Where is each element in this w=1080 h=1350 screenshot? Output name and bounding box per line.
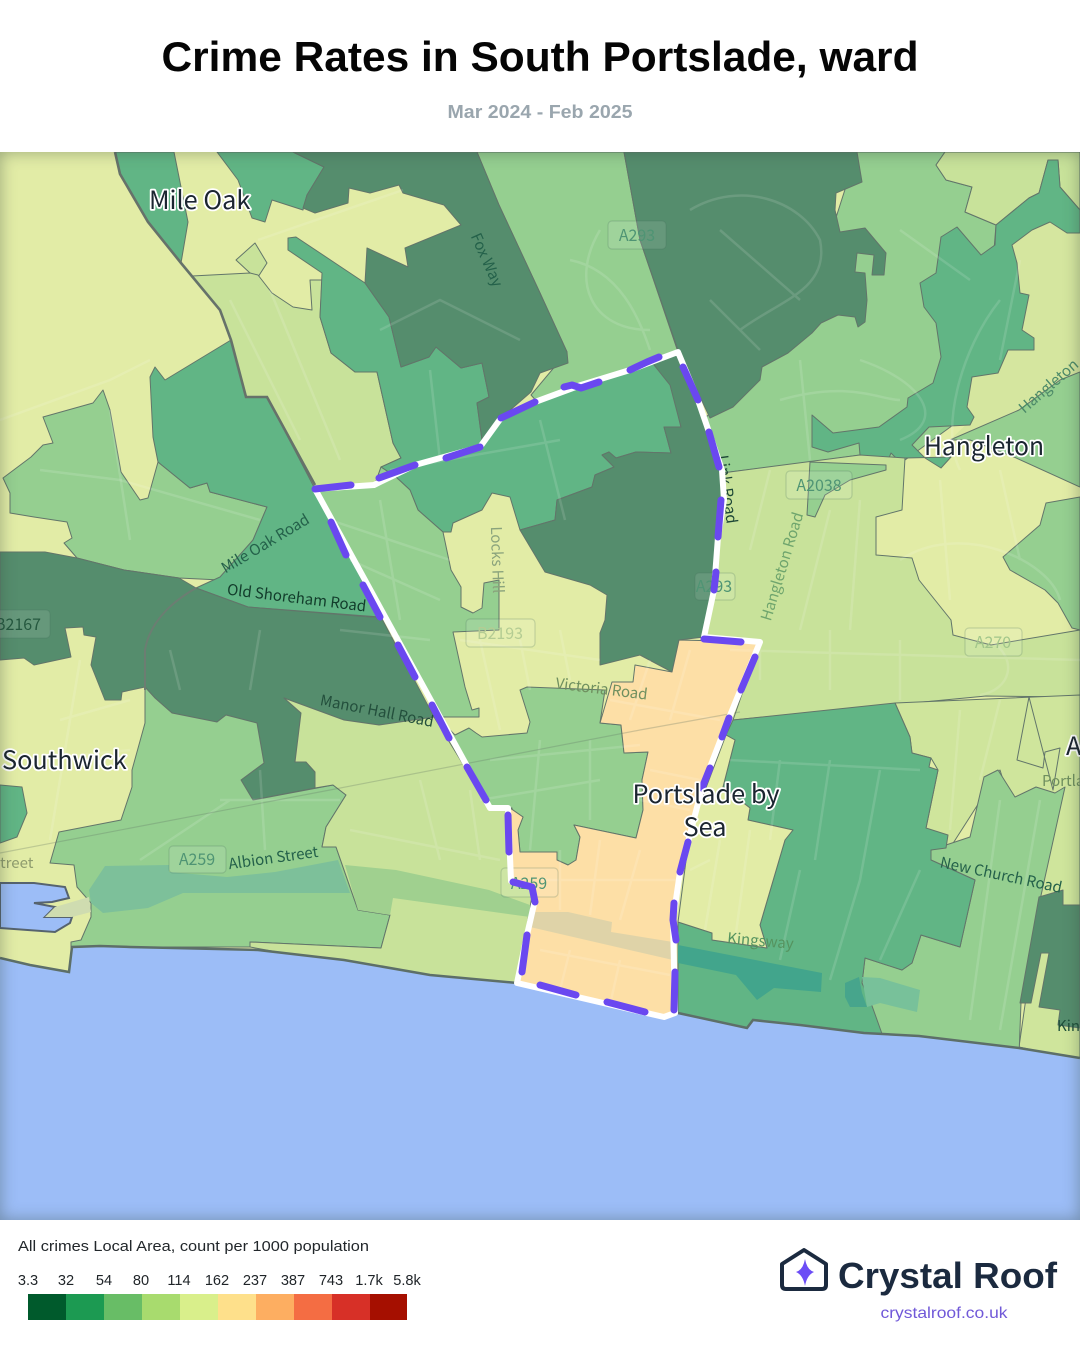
area: ward dark green	[520, 352, 724, 672]
legend scale values: 743	[319, 1273, 343, 1289]
road labels: Victoria Road	[555, 672, 649, 705]
area: Southwick green patch	[0, 785, 27, 843]
road shields: A293	[696, 573, 732, 597]
road labels: Link Road	[712, 454, 743, 525]
boundary line west of ward	[115, 152, 315, 485]
road labels: Albion Street	[227, 841, 320, 874]
road labels: Locks Hill	[486, 526, 509, 594]
area: ward south mid green	[445, 687, 648, 865]
road shields: A259	[511, 870, 547, 894]
area: Southwick mid green	[50, 687, 390, 953]
area: east mid green below road	[950, 372, 1080, 487]
legend scale values: 114	[167, 1273, 191, 1289]
area: Hangleton green band	[812, 160, 1080, 468]
area: south-east mid green	[862, 770, 1065, 1055]
harbour water	[0, 883, 72, 932]
area: west mid green	[3, 390, 267, 580]
area: Old Shoreham Road dark green	[0, 552, 434, 800]
area: seafront pale green	[250, 698, 533, 984]
road labels: Kin	[1057, 1015, 1080, 1036]
road labels: New Church Road	[938, 851, 1064, 898]
legend scale values: 32	[58, 1273, 74, 1289]
road labels: Mile Oak Road	[217, 509, 313, 578]
area: ward orange high-crime zone	[510, 640, 760, 1017]
legend scale values: 3.3	[18, 1273, 38, 1289]
area: central south-east green	[678, 703, 975, 1045]
area: central north mid green	[477, 152, 678, 405]
area: north dark green	[293, 152, 568, 440]
legend scale values: 54	[96, 1273, 112, 1289]
choropleth map	[0, 145, 1080, 1220]
wordmark: Crystal Roof	[838, 1255, 1058, 1296]
area: south-east dark green	[1020, 890, 1080, 1028]
area: Kingsway green space	[678, 945, 822, 1000]
legend scale values: 5.8k	[393, 1273, 421, 1289]
area: north green	[288, 237, 681, 532]
place names: Portslade by	[632, 775, 780, 811]
place names: Hangleton	[924, 427, 1044, 463]
legend scale values: 1.7k	[355, 1273, 383, 1289]
legend scale values: 80	[133, 1273, 149, 1289]
sea	[0, 947, 1080, 1220]
area: pale green south-east	[895, 695, 1080, 1060]
place names	[2, 181, 1080, 844]
road labels	[0, 230, 1080, 1036]
legend scale values	[18, 1273, 421, 1289]
ward boundary: white line with purple dashes	[315, 352, 760, 1017]
road labels: Old Shoreham Road	[226, 579, 367, 616]
road shields	[0, 221, 1022, 897]
road shields: A293	[619, 222, 655, 246]
area: ward west mid green	[315, 467, 499, 717]
area: north dark green, east of ward	[624, 152, 886, 418]
faint street network	[0, 190, 1080, 1030]
area: north-west green strip	[115, 152, 188, 263]
road shields: B2193	[477, 620, 523, 644]
subtitle: date range: Mar 2024 - Feb 2025	[448, 101, 632, 122]
legend scale values: 162	[205, 1273, 229, 1289]
legend scale values: 237	[243, 1273, 267, 1289]
area: north-east pale green	[936, 152, 1080, 225]
road labels: Hangleton Road	[755, 510, 808, 623]
area: pale green strip	[192, 273, 401, 489]
area: east pale strip	[950, 222, 1080, 440]
title: Crime Rates in South Portslade, ward	[162, 33, 918, 80]
road shields: A2038	[796, 472, 842, 496]
place names: Southwick	[2, 741, 127, 777]
road labels: treet	[0, 852, 34, 873]
website link text: crystalroof.co.uk	[880, 1305, 1009, 1322]
area: yellow wedge east of ward	[678, 735, 793, 948]
legend scale values: 387	[281, 1273, 305, 1289]
area: west green	[150, 340, 380, 617]
place names: Sea	[684, 808, 726, 844]
road labels: Manor Hall Road	[318, 689, 436, 732]
area: north-east mid green	[705, 152, 996, 473]
legend colour swatches	[28, 1294, 407, 1320]
legend title: All crimes Local Area, count per 1000 population	[18, 1239, 369, 1255]
road shields: A259	[179, 846, 215, 870]
road labels: Fox Way	[466, 230, 508, 290]
icon: house with star	[782, 1250, 826, 1289]
legend	[18, 1239, 421, 1320]
road shields: A270	[975, 629, 1011, 653]
logo: Crystal Roof	[782, 1250, 1058, 1322]
place names: Mile Oak	[149, 181, 250, 217]
area: pale green east of ward	[704, 455, 1080, 720]
road labels: Kingsway	[726, 927, 795, 954]
marina and harbour teal	[89, 860, 350, 913]
